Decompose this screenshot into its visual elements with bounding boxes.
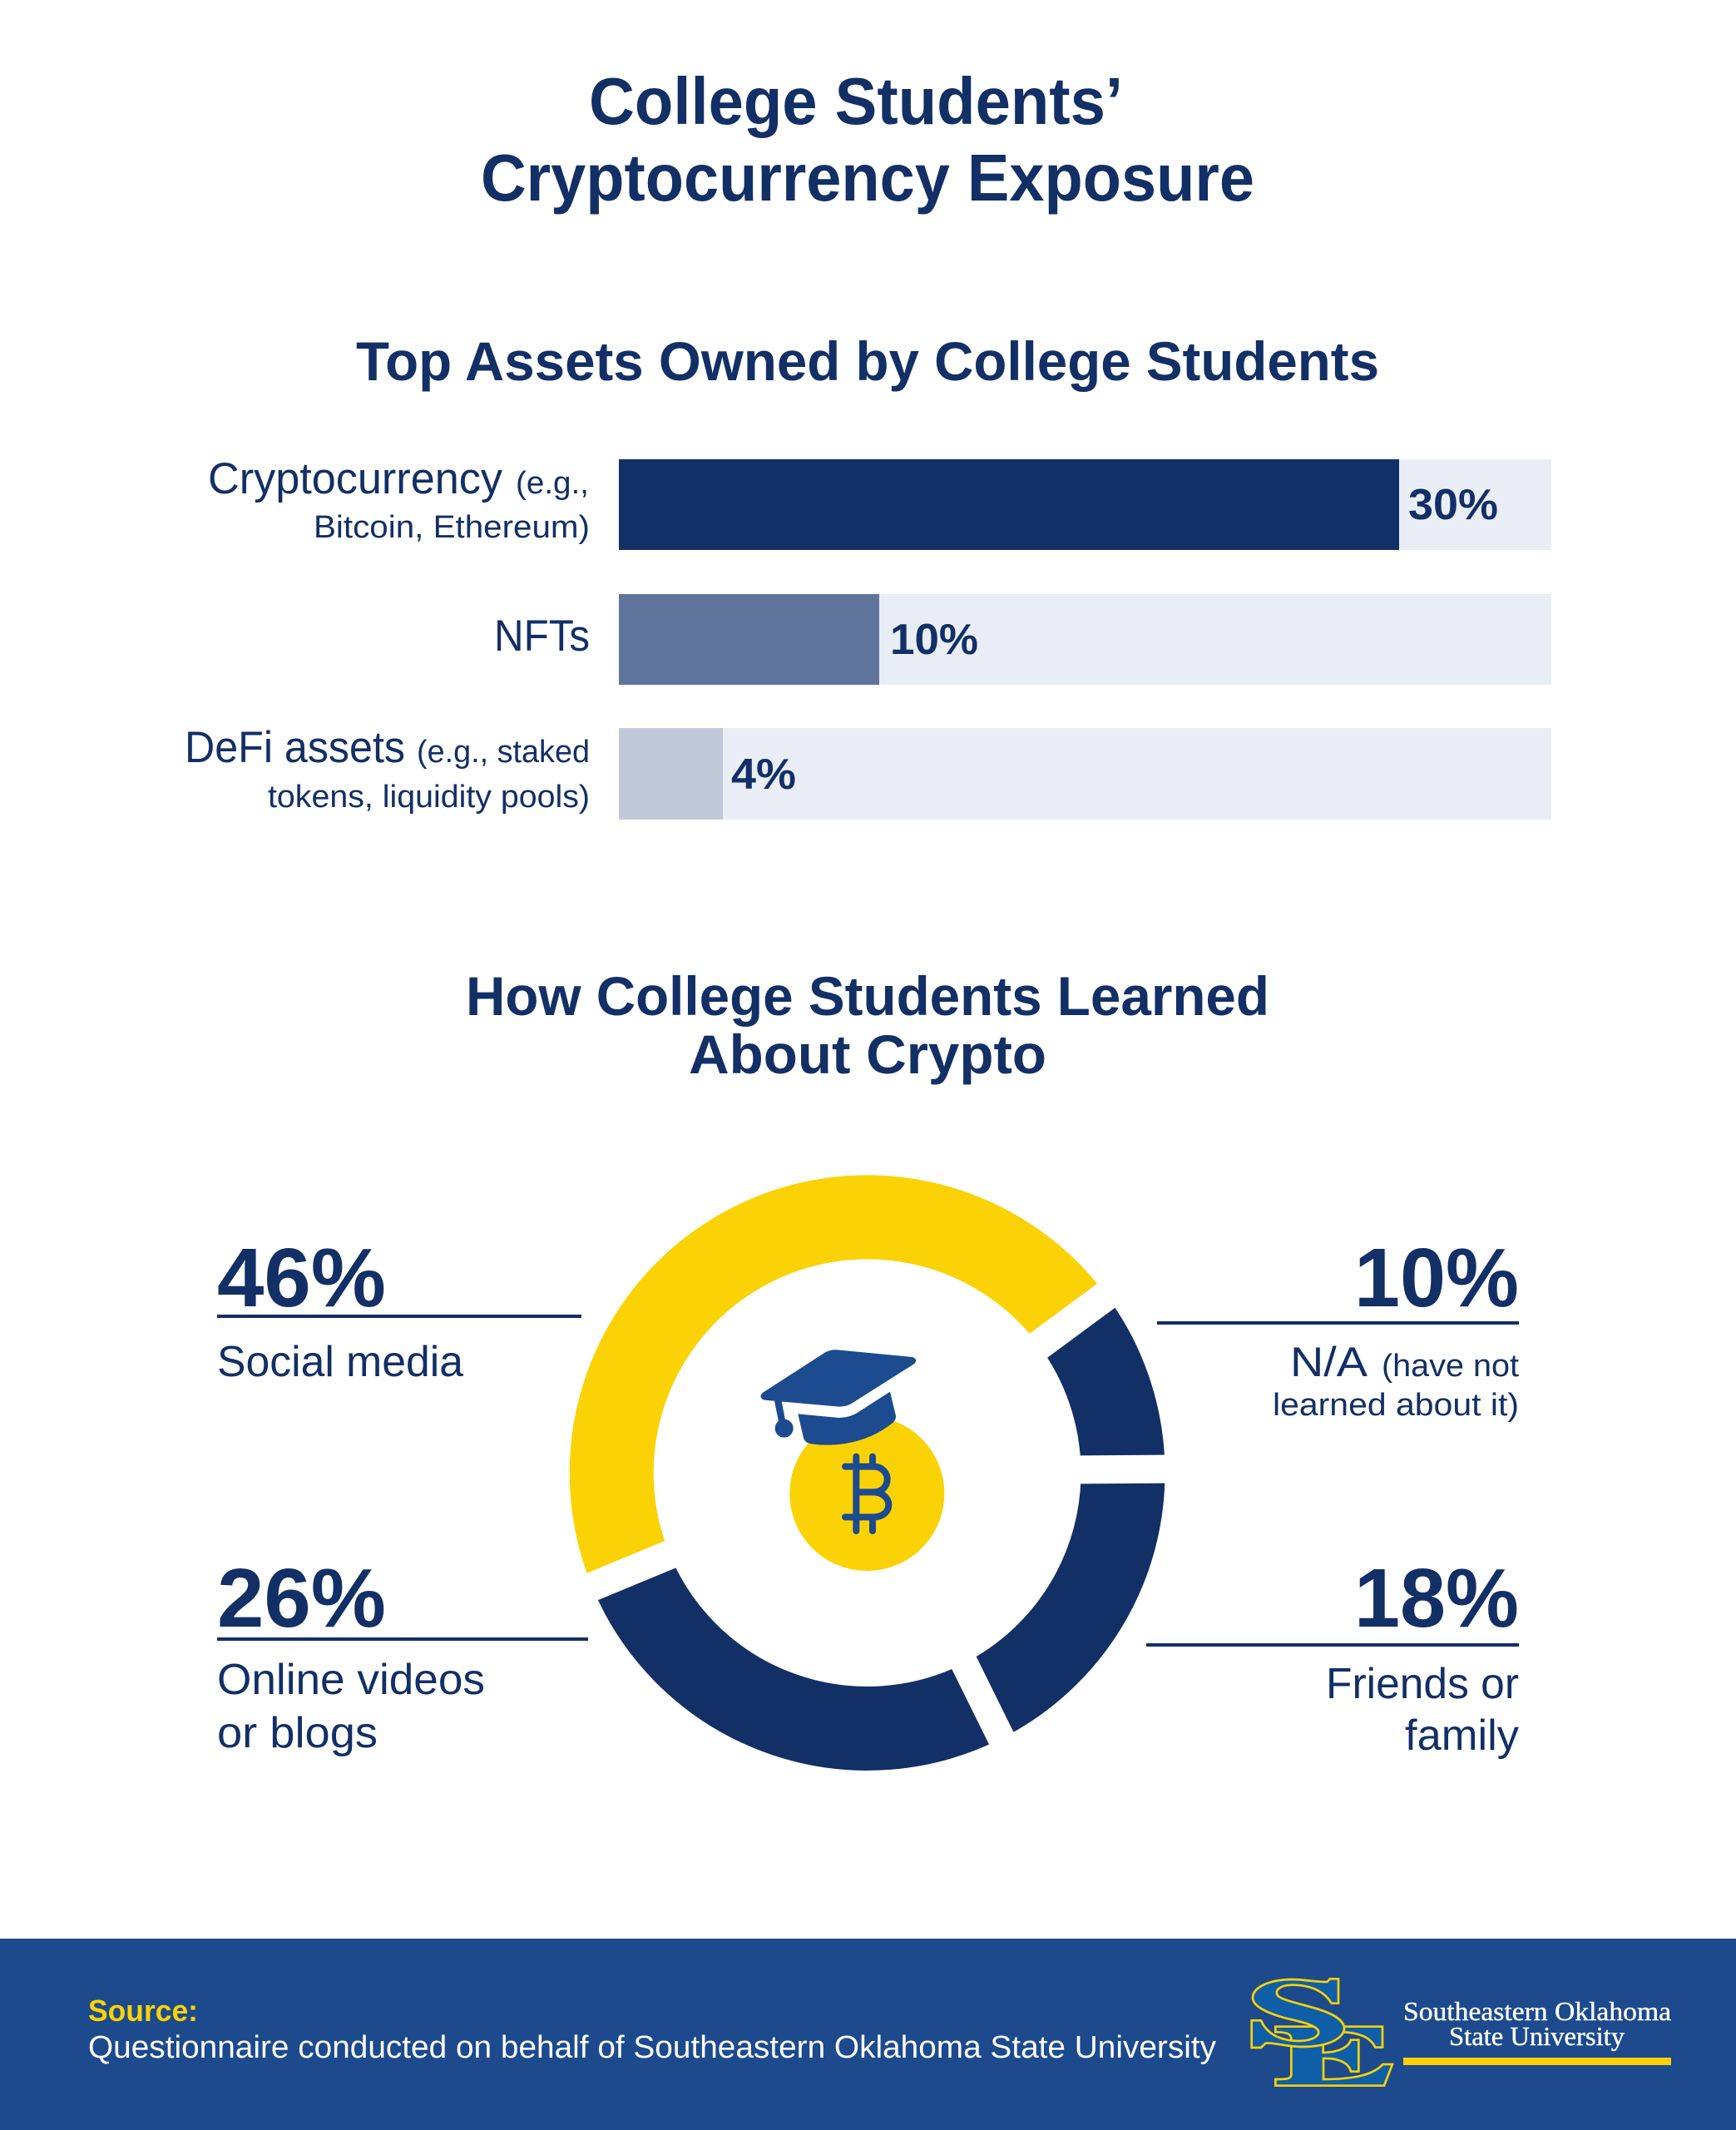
title: College Students’ (589, 64, 1123, 138)
stat: 46% social media (217, 1231, 581, 1386)
bar row: NFTs: NFTs (494, 612, 590, 661)
icon: bitcoin coin with graduation cap (761, 1350, 944, 1571)
stat: 18% friends or family: family (1405, 1711, 1519, 1760)
bar row: DeFi assets: (e.g., staked (417, 735, 590, 770)
segment: online videos 26% (631, 1570, 983, 1728)
stat: 10% N/A: (have not (1382, 1349, 1519, 1384)
stat: 10% N/A: learned about it) (1273, 1388, 1519, 1423)
bar row: cryptocurrency: Bitcoin, Ethereum) (314, 510, 590, 545)
logo: university name: State University (1449, 2021, 1625, 2051)
source note: Source: (88, 1994, 198, 2028)
bar row: cryptocurrency: (e.g., (516, 466, 589, 501)
bar row: cryptocurrency (208, 454, 1551, 550)
segment: friends or family 18% (983, 1469, 1123, 1701)
stat: 18% friends or family: 18% (1354, 1552, 1519, 1645)
title: Cryptocurrency Exposure (481, 141, 1254, 215)
bar row: cryptocurrency: 30% (1408, 481, 1498, 529)
stat: 26% online videos or blogs: Online videos (217, 1656, 485, 1704)
bar row: DeFi assets: 4% (731, 750, 796, 799)
stat: 10% N/A (1157, 1231, 1519, 1423)
heading: how students learned: How College Students Learned (466, 965, 1269, 1027)
stat: 10% N/A: 10% (1354, 1231, 1519, 1325)
logo: university name: Southeastern Oklahoma (1403, 1996, 1671, 2026)
stat: 46% social media: Social media (217, 1338, 463, 1386)
bar row: DeFi assets: tokens, liquidity pools) (268, 780, 590, 815)
stat: 26% online videos or blogs (217, 1552, 588, 1757)
heading: how students learned (466, 965, 1269, 1085)
bar row: NFTs: 10% (890, 616, 978, 664)
stat: 46% social media: 46% (217, 1231, 386, 1325)
title (481, 64, 1254, 215)
bar chart: top assets (185, 454, 1551, 820)
heading: top assets: Top Assets Owned by College Students (356, 330, 1379, 392)
stat: 10% N/A: N/A (1290, 1339, 1368, 1385)
bar row: DeFi assets: DeFi assets (185, 723, 405, 772)
stat: 18% friends or family (1146, 1552, 1519, 1760)
donut chart (557, 1217, 1181, 1766)
stat: 18% friends or family: Friends or (1326, 1660, 1519, 1708)
source note: Questionnaire conducted on behalf of Southeastern Oklahoma State University (88, 2030, 1216, 2065)
footer band (0, 1939, 1736, 2130)
segment: N/A 10% (1073, 1321, 1123, 1469)
logo: university name (1403, 1996, 1671, 2065)
bar row: cryptocurrency: Cryptocurrency (208, 454, 502, 503)
heading: how students learned: About Crypto (689, 1023, 1046, 1085)
stat: 26% online videos or blogs: or blogs (217, 1709, 378, 1757)
segment: social media 46% (611, 1217, 1073, 1570)
bar row: NFTs (494, 594, 1551, 685)
stat: 26% online videos or blogs: 26% (217, 1552, 386, 1645)
logo: SE monogram (1252, 1979, 1392, 2086)
bar row: DeFi assets (185, 723, 1551, 820)
source note (88, 1994, 1216, 2065)
